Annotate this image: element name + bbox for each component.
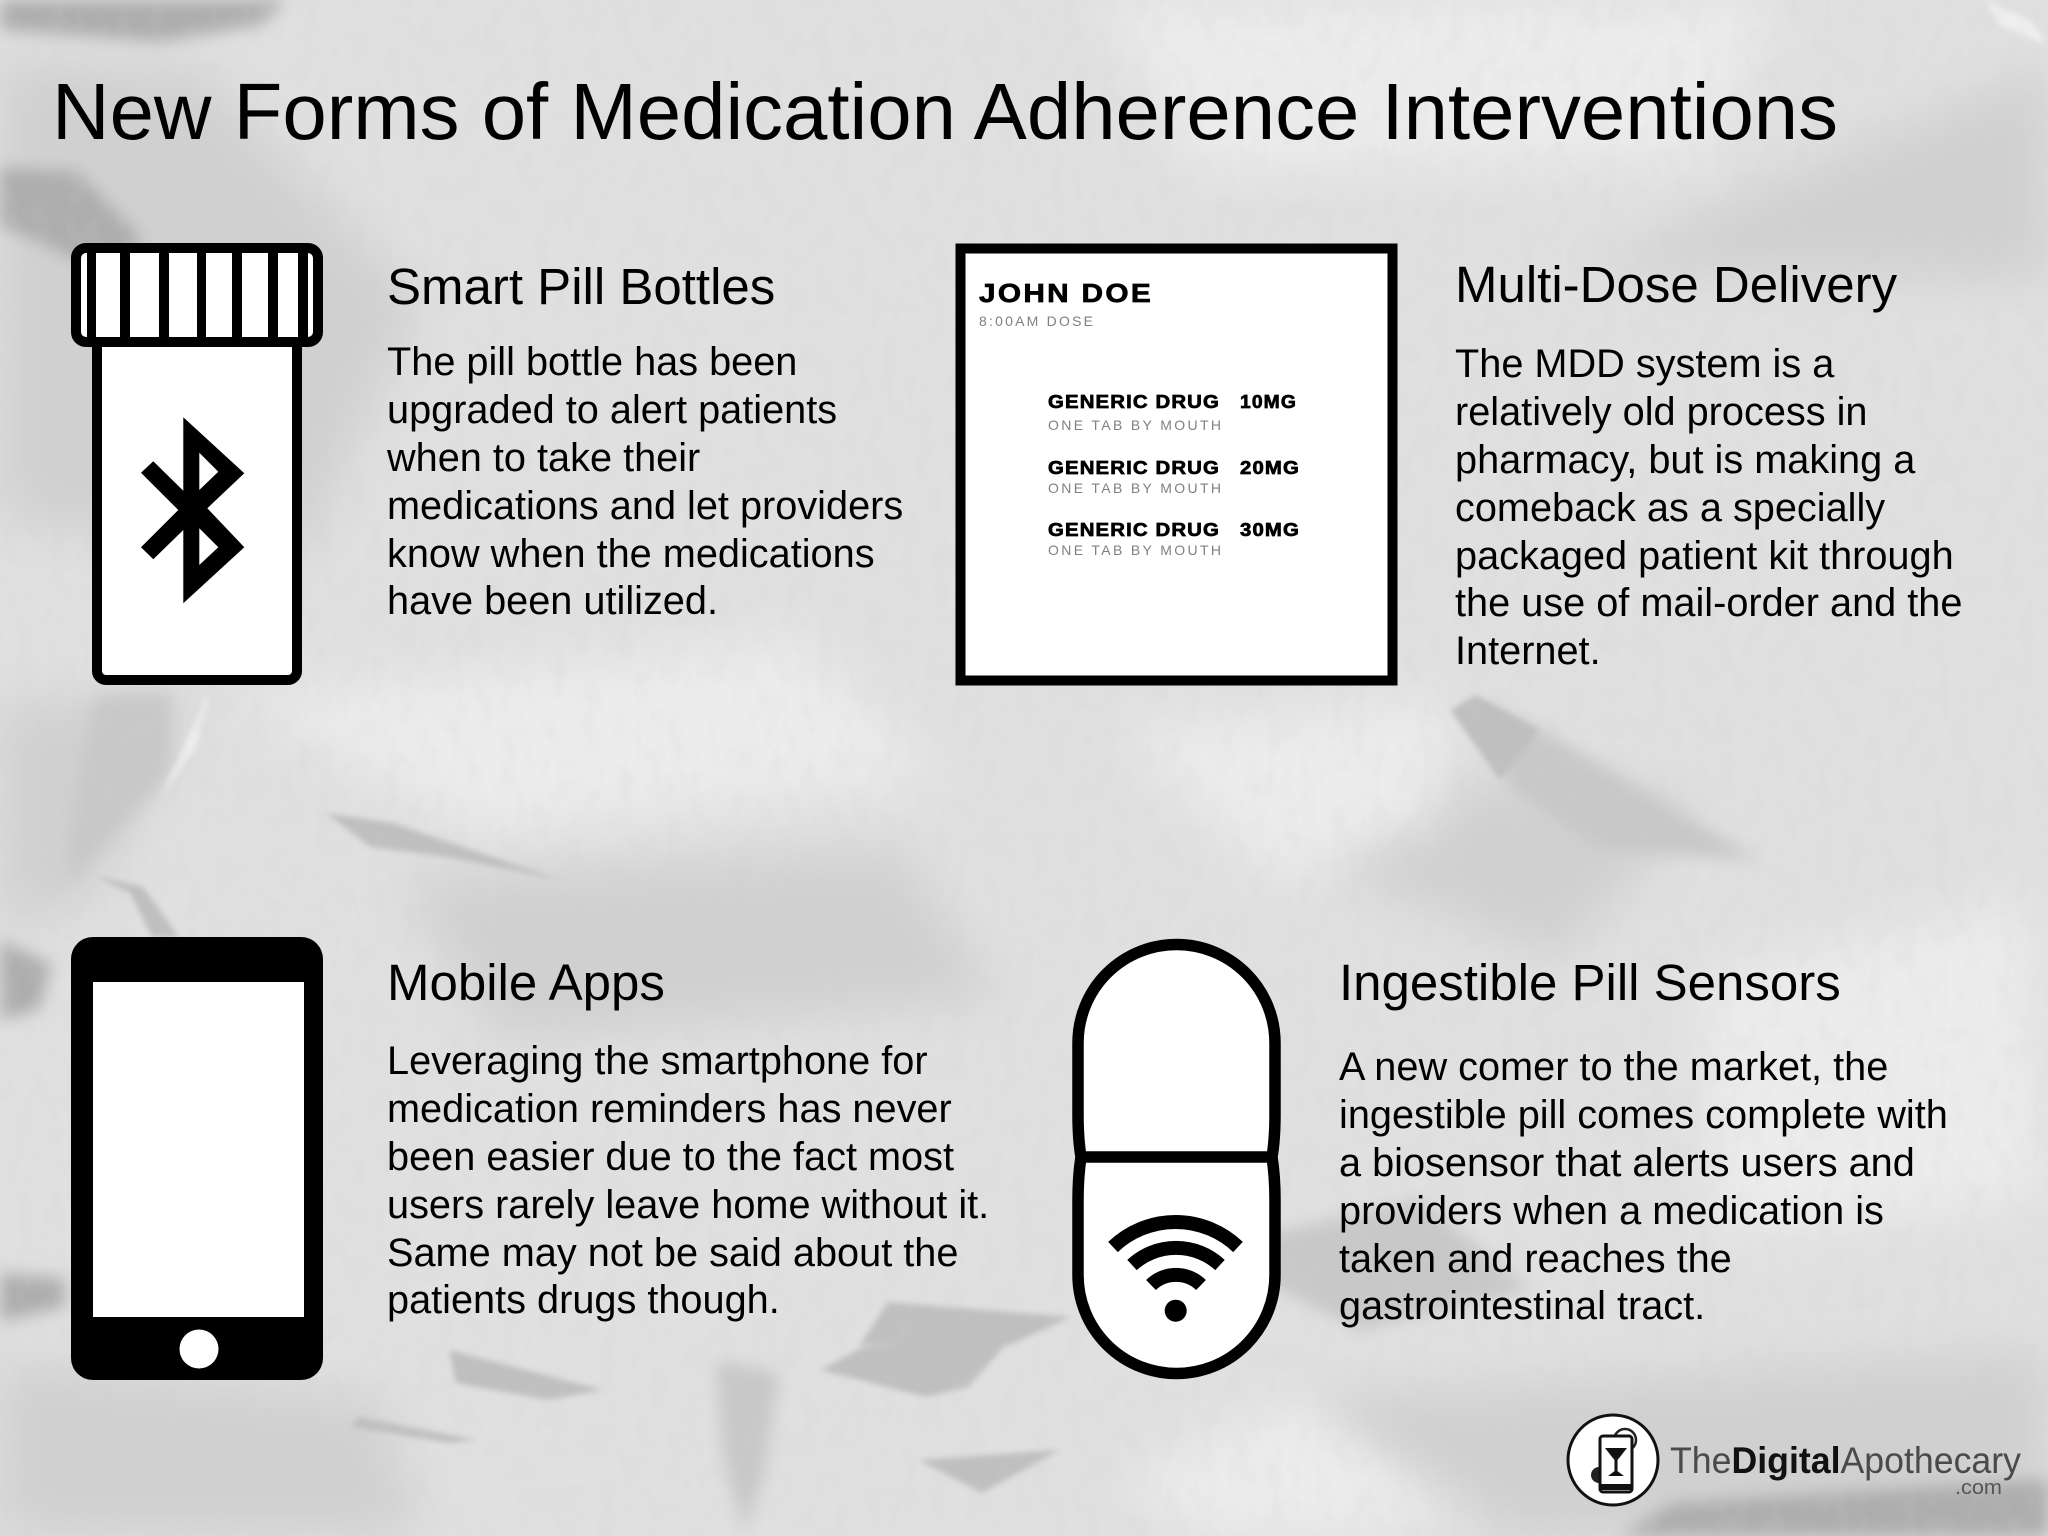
text block: mobile apps description: Same may not be said about the — [387, 1231, 958, 1275]
heading: mobile apps: Mobile Apps — [387, 954, 665, 1011]
icon: multi-dose packet label: 8:00AM DOSE — [979, 313, 1093, 329]
text block: smart pill bottles description: know when the medications — [387, 532, 875, 576]
icon: capsule with wifi — [1078, 944, 1275, 1374]
text block: smart pill bottles description: upgraded to alert patients — [387, 388, 837, 432]
text block: mobile apps description: patients drugs though. — [387, 1278, 780, 1322]
icon: multi-dose packet label: GENERIC DRUG — [1048, 392, 1220, 412]
text block: smart pill bottles description: when to take their — [386, 436, 700, 480]
icon: multi-dose packet label: 10MG — [1240, 392, 1297, 412]
panel: ingestible pill sensors — [1078, 944, 1959, 1374]
text block: ingestible pill sensors description: gastrointestinal tract. — [1339, 1284, 1705, 1328]
panel: mobile apps — [71, 937, 1000, 1380]
icon: multi-dose packet label: 20MG — [1240, 458, 1300, 478]
logo wordmark: TheDigitalApothecary — [1670, 1440, 2021, 1481]
text block: mobile apps description: medication reminders has never — [387, 1087, 952, 1131]
text block: multi-dose delivery description: the use of mail-order and the — [1455, 581, 1962, 625]
text block: multi-dose delivery description: The MDD system is a — [1455, 342, 1835, 386]
text block: multi-dose delivery description: comeback as a specially — [1455, 486, 1885, 530]
icon: multi-dose packet label: ONE TAB BY MOUTH — [1048, 542, 1221, 558]
heading: multi-dose delivery: Multi-Dose Delivery — [1455, 256, 1898, 313]
heading: smart pill bottles: Smart Pill Bottles — [387, 258, 775, 315]
panel: smart pill bottles — [76, 248, 914, 680]
text block: ingestible pill sensors description: A new comer to the market, the — [1339, 1045, 1888, 1089]
icon: multi-dose packet label: GENERIC DRUG — [1048, 520, 1220, 540]
text block: ingestible pill sensors description: providers when a medication is — [1339, 1189, 1884, 1233]
icon: multi-dose packet label — [960, 248, 1392, 680]
icon: pill bottle with bluetooth — [76, 248, 318, 680]
icon: smartphone — [71, 937, 323, 1380]
text block: mobile apps description: been easier due to the fact most — [387, 1135, 954, 1179]
label: patient name: JOHN DOE — [979, 278, 1153, 308]
icon: multi-dose packet label: GENERIC DRUG — [1048, 458, 1220, 478]
panel: multi-dose delivery — [960, 248, 1973, 680]
logo domain: .com — [1955, 1477, 2002, 1499]
icon: multi-dose packet label: 30MG — [1240, 520, 1300, 540]
icon: logo badge — [1568, 1415, 1658, 1505]
text block: ingestible pill sensors description: ingestible pill comes complete with — [1339, 1093, 1948, 1137]
text block: mobile apps description: users rarely leave home without it. — [387, 1183, 989, 1227]
icon: multi-dose packet label: ONE TAB BY MOUTH — [1048, 417, 1221, 433]
logo: The Digital Apothecary — [1568, 1415, 2021, 1505]
text block: multi-dose delivery description: Internet. — [1455, 629, 1601, 673]
text block: smart pill bottles description: The pill bottle has been — [387, 340, 797, 384]
text block: multi-dose delivery description: packaged patient kit through — [1455, 534, 1954, 578]
icon: multi-dose packet label: ONE TAB BY MOUTH — [1048, 480, 1221, 496]
title: New Forms of Medication Adherence Interventions — [52, 67, 1838, 156]
text block: smart pill bottles description: have been utilized. — [387, 579, 718, 623]
text block: mobile apps description: Leveraging the smartphone for — [387, 1039, 928, 1083]
text block: ingestible pill sensors description: taken and reaches the — [1339, 1237, 1732, 1281]
text block: smart pill bottles description: medications and let providers — [387, 484, 903, 528]
text block: multi-dose delivery description: relatively old process in — [1455, 390, 1868, 434]
heading: ingestible pill sensors: Ingestible Pill Sensors — [1339, 954, 1841, 1011]
text block: multi-dose delivery description: pharmacy, but is making a — [1455, 438, 1916, 482]
text block: ingestible pill sensors description: a biosensor that alerts users and — [1339, 1141, 1915, 1185]
